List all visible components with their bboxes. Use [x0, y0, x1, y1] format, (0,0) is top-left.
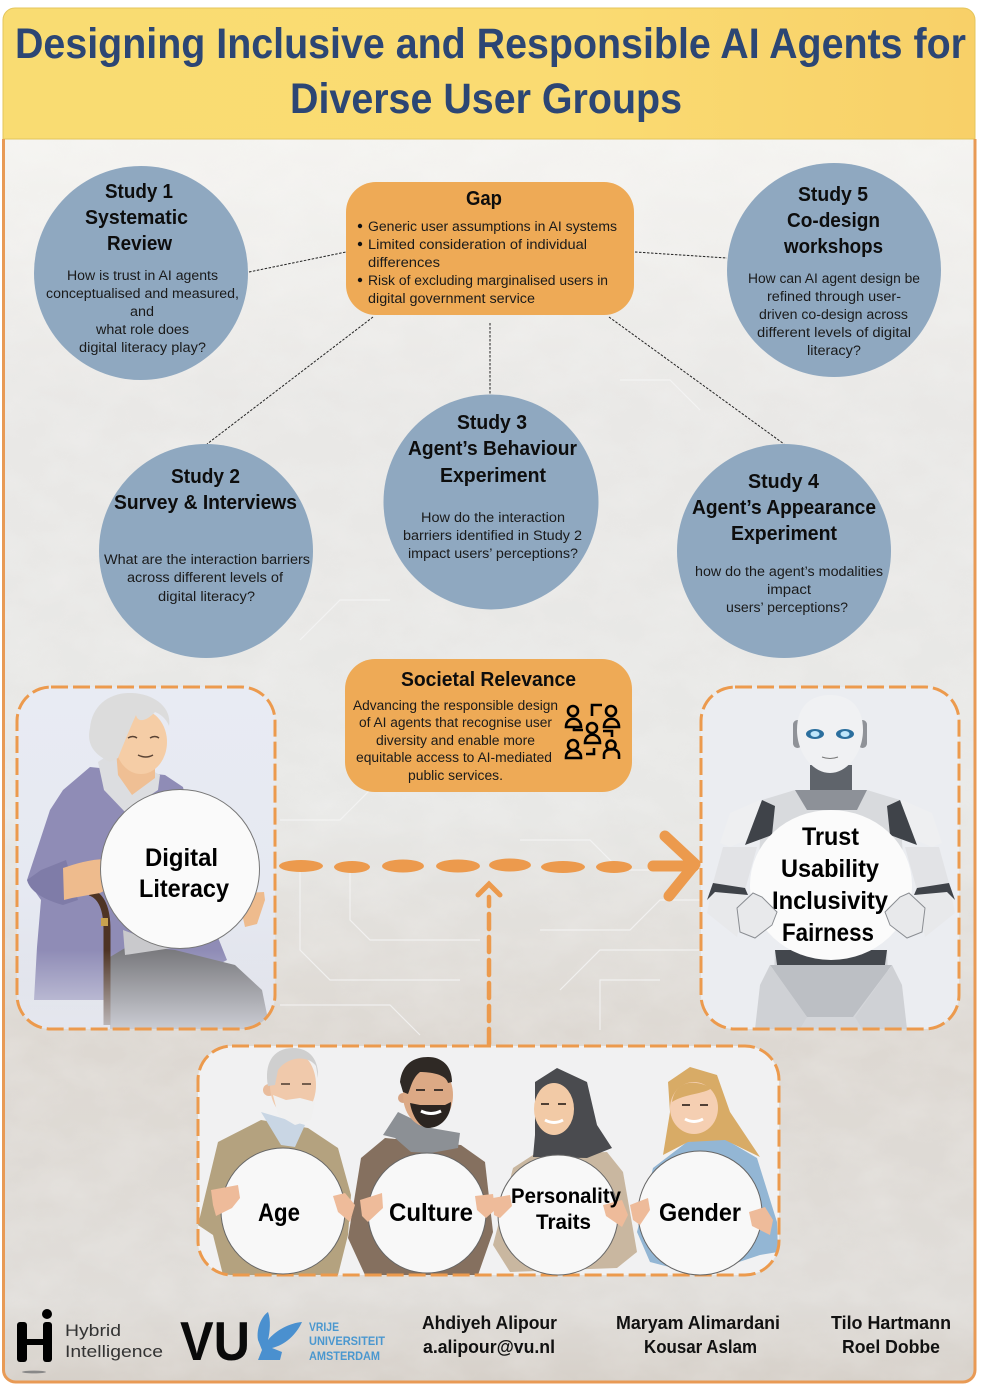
label: gender: Gender: [659, 1199, 741, 1227]
logo: hybrid intelligence: Intelligence: [65, 1342, 163, 1361]
panel: study 5: workshops: [783, 236, 883, 258]
panel: gap: Risk of excluding marginalised users in: [368, 273, 608, 288]
panel: study 3: [384, 394, 598, 610]
logo: vrije universiteit amsterdam: [180, 1310, 385, 1372]
title banner: [3, 8, 975, 139]
illustration: four people: [198, 1048, 778, 1275]
panel: study 1: conceptualised and measured,: [46, 286, 239, 301]
panel: study 5: Study 5: [798, 184, 868, 206]
panel: gap: digital government service: [368, 291, 535, 306]
panel: study 1: what role does: [95, 322, 189, 337]
panel: study 2: across different levels of: [127, 570, 283, 585]
arrow: user factors to main path: [478, 884, 500, 1044]
label: age: Age: [258, 1199, 300, 1227]
panel: study 3: How do the interaction: [421, 510, 565, 525]
panel: study 5: different levels of digital: [757, 325, 911, 340]
illustration: robot hands: [737, 893, 925, 938]
authors: first author: [422, 1313, 557, 1357]
logo: hybrid intelligence: Hybrid: [65, 1321, 121, 1340]
authors: second column: Maryam Alimardani: [616, 1313, 780, 1333]
panel: societal relevance: equitable access to AI-mediated: [356, 750, 552, 765]
label: personality traits: Personality: [511, 1185, 621, 1208]
panel: study 3: Experiment: [440, 465, 546, 487]
icon: connected people: [566, 705, 619, 759]
panel: outcomes: [701, 687, 959, 1029]
panel: societal relevance: public services.: [408, 768, 503, 783]
logo: hybrid intelligence: [17, 1309, 163, 1373]
authors: third column: Roel Dobbe: [842, 1337, 940, 1357]
panel: study 3: Agent’s Behaviour: [408, 438, 577, 460]
panel: study 2: digital literacy?: [158, 589, 255, 604]
panel: study 4: [677, 444, 891, 658]
panel: gap: [346, 182, 634, 315]
panel: study 5: driven co-design across: [759, 307, 908, 322]
sign: digital literacy: Literacy: [139, 875, 229, 903]
panel: study 4: impact: [767, 582, 811, 597]
panel: study 4: Experiment: [731, 523, 837, 545]
panel: study 1: digital literacy play?: [79, 340, 206, 355]
logo: vrije universiteit amsterdam: VRIJE: [309, 1322, 339, 1334]
panel: study 5: literacy?: [807, 343, 861, 358]
panel: study 3: impact users’ perceptions?: [408, 546, 578, 561]
panel: user factors: [198, 1046, 779, 1275]
panel: study 3: Study 3: [457, 412, 527, 434]
panel: study 1: Review: [107, 233, 172, 255]
panel: study 5: refined through user-: [767, 289, 901, 304]
sign: gender: [638, 1151, 762, 1275]
panel: study 4: Study 4: [748, 471, 820, 493]
sign: culture: [368, 1153, 486, 1273]
sign: outcome measures: [750, 810, 912, 960]
panel: study 4: users’ perceptions?: [726, 600, 848, 615]
panel: study 4: how do the agent’s modalities: [695, 564, 883, 579]
panel: study 1: Study 1: [105, 181, 173, 203]
panel: societal relevance: Societal Relevance: [401, 669, 576, 691]
sign: outcome measures: Fairness: [782, 919, 874, 947]
authors: first author: Ahdiyeh Alipour: [422, 1313, 557, 1333]
illustration: robot: [707, 695, 955, 1029]
panel: gap: Generic user assumptions in AI systems: [368, 219, 617, 234]
label: personality traits: [511, 1185, 621, 1234]
sign: digital literacy: Digital: [145, 844, 218, 872]
panel: study 1: Systematic: [85, 207, 188, 229]
authors: second column: Kousar Aslam: [644, 1337, 757, 1357]
connector lines from gap to studies: [207, 252, 784, 444]
illustration: hands holding signs: [211, 1185, 773, 1235]
sign: age: [221, 1148, 345, 1274]
title banner: Diverse User Groups: [290, 75, 682, 123]
panel: societal relevance: of AI agents that recognise user: [359, 715, 553, 730]
sign: digital literacy: [100, 790, 260, 948]
authors: third column: Tilo Hartmann: [831, 1313, 951, 1333]
panel: societal relevance: diversity and enable more: [376, 733, 535, 748]
panel: study 1: How is trust in AI agents: [67, 268, 218, 283]
label: personality traits: Traits: [536, 1211, 591, 1234]
panel: study 2: [99, 444, 313, 658]
panel: gap: Gap: [466, 188, 502, 210]
panel: study 5: [727, 163, 941, 377]
authors: second column: [616, 1313, 780, 1357]
panel: study 2: Survey & Interviews: [114, 492, 297, 514]
panel: study 4: Agent’s Appearance: [692, 497, 876, 519]
panel: gap: differences: [368, 255, 440, 270]
panel: study 5: How can AI agent design be: [748, 271, 920, 286]
illustration: elderly woman: [17, 693, 275, 1029]
arrow: digital literacy to outcomes: [279, 836, 695, 896]
label: culture: Culture: [389, 1199, 473, 1227]
panel: gap: Limited consideration of individual: [368, 237, 587, 252]
panel: study 1: [34, 166, 248, 380]
authors: third column: [831, 1313, 951, 1357]
sign: personality: [498, 1155, 618, 1275]
logo: vrije universiteit amsterdam: VU: [180, 1310, 250, 1372]
panel: study 1: and: [130, 304, 154, 319]
logo: vrije universiteit amsterdam: AMSTERDAM: [309, 1351, 380, 1363]
panel: societal relevance: [345, 659, 632, 792]
logo: vrije universiteit amsterdam: UNIVERSITEIT: [309, 1336, 385, 1348]
sign: outcome measures: Inclusivity: [772, 887, 888, 915]
panel: study 5: Co-design: [787, 210, 880, 232]
panel: study 2: What are the interaction barriers: [104, 552, 310, 567]
panel: societal relevance: Advancing the responsible design: [353, 698, 558, 713]
sign: outcome measures: Trust: [802, 823, 860, 851]
panel: study 2: Study 2: [171, 466, 240, 488]
authors: first author: a.alipour@vu.nl: [423, 1337, 555, 1357]
panel: digital literacy: [17, 687, 275, 1029]
sign: outcome measures: Usability: [781, 855, 879, 883]
panel: study 3: barriers identified in Study 2: [403, 528, 582, 543]
